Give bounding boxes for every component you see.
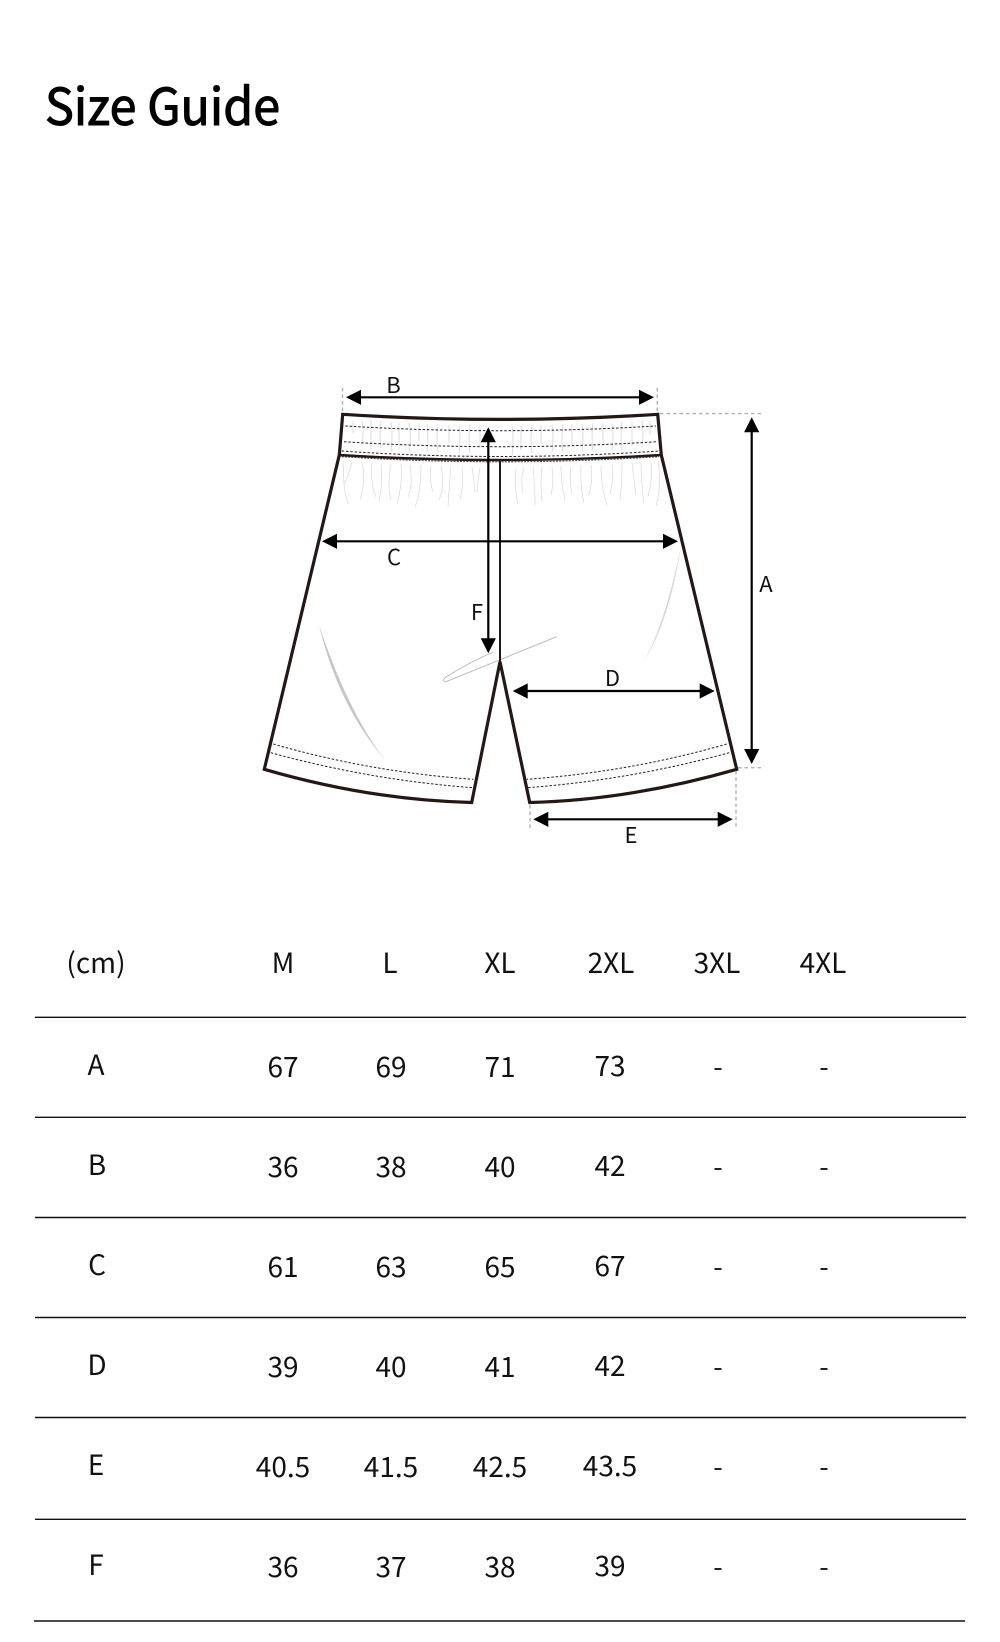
measure labels: A (759, 567, 773, 599)
waist seam (339, 455, 661, 460)
row B: B (88, 1144, 106, 1184)
row D: 42 (594, 1345, 626, 1385)
row F: 36 (267, 1546, 299, 1586)
row B (88, 1144, 828, 1186)
row C: 61 (267, 1246, 299, 1286)
row F: 39 (594, 1545, 626, 1585)
row B: 40 (484, 1146, 516, 1186)
row E: E (88, 1444, 104, 1484)
row A: A (87, 1044, 105, 1084)
measure labels: E (625, 818, 637, 850)
row A: 71 (484, 1046, 516, 1086)
row B: 36 (267, 1146, 299, 1186)
measure labels: B (386, 368, 401, 400)
row D (87, 1344, 828, 1386)
hem stitching (271, 744, 729, 788)
header row: 3XL (694, 942, 740, 982)
header row: M (272, 942, 294, 982)
row C: 65 (484, 1246, 516, 1286)
measure labels (386, 368, 773, 850)
measure labels: F (471, 595, 483, 627)
row E: 43.5 (583, 1445, 637, 1485)
row E: 40.5 (256, 1446, 310, 1486)
header row: 4XL (800, 942, 846, 982)
title: Size Guide (45, 66, 280, 140)
row C: 63 (375, 1246, 407, 1286)
row A: 69 (375, 1046, 407, 1086)
row F: 37 (375, 1546, 407, 1586)
waistband stitching (342, 426, 659, 456)
row B: 42 (594, 1145, 626, 1185)
header row (66, 942, 846, 982)
header row: L (382, 942, 398, 982)
row A: 73 (594, 1045, 626, 1085)
arrow B (346, 390, 654, 405)
row D: 39 (267, 1346, 299, 1386)
row A (87, 1044, 828, 1086)
row E: 42.5 (473, 1446, 527, 1486)
row C: 67 (594, 1245, 626, 1285)
gather folds (353, 420, 650, 456)
row E: 41.5 (364, 1446, 418, 1486)
row F: F (88, 1544, 104, 1584)
table rules (34, 1017, 966, 1621)
row F: 38 (484, 1546, 516, 1586)
row B: 38 (375, 1146, 407, 1186)
arrow C (322, 534, 678, 549)
guide lines (342, 388, 762, 829)
measure labels: D (605, 661, 620, 693)
row F (88, 1544, 828, 1586)
header row: 2XL (588, 942, 634, 982)
row D: D (87, 1344, 107, 1384)
measure labels: C (387, 540, 401, 572)
row C (88, 1244, 828, 1286)
size table (34, 942, 966, 1621)
arrow D (513, 683, 715, 699)
row D: 41 (484, 1346, 516, 1386)
row C: C (88, 1244, 106, 1284)
row E (88, 1444, 828, 1486)
shorts garment (264, 414, 737, 802)
shorts outline (264, 414, 737, 802)
arrow F (481, 427, 496, 653)
arrow A (744, 417, 759, 764)
header row: (cm) (66, 942, 126, 982)
header row: XL (484, 942, 516, 982)
center seam (499, 459, 501, 662)
pocket and thigh folds (319, 625, 385, 760)
row A: 67 (267, 1046, 299, 1086)
diagram: shorts with measurements (264, 368, 773, 850)
row D: 40 (375, 1346, 407, 1386)
arrow E (533, 812, 733, 827)
